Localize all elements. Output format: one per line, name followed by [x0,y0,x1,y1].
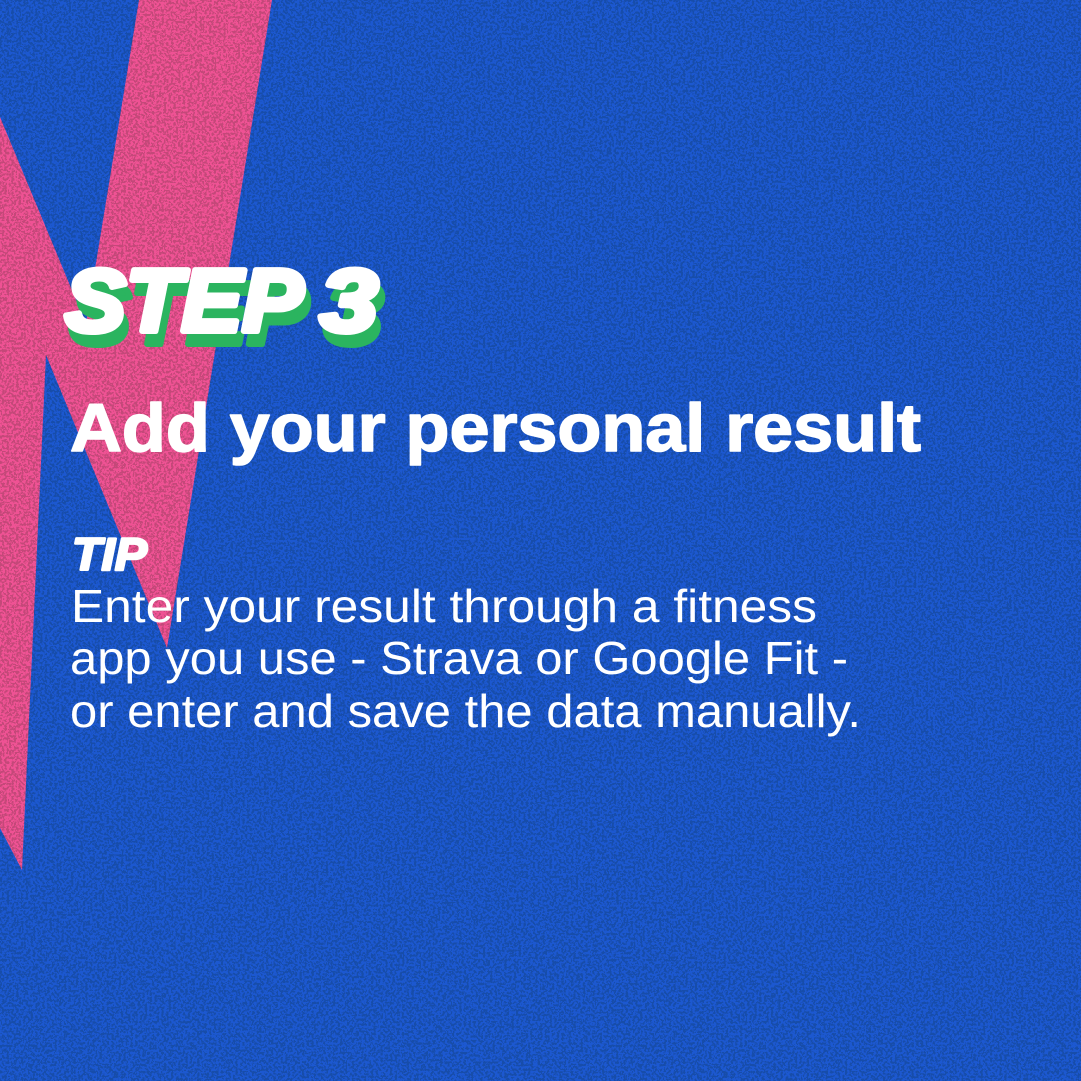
heading: STEP 3 [65,251,383,363]
heading: STEP 3: 3 [325,264,383,363]
lightning bolt shape [0,0,272,870]
tip body text: Enter your result through a fitness [71,580,817,632]
tip body text: or enter and save the data manually. [70,685,861,737]
heading: STEP 3: STEP [65,251,303,350]
tip body text: app you use - Strava or Google Fit - [70,632,848,684]
heading: STEP 3: STEP [70,264,308,363]
heading: Add your personal result: Add your personal result [70,390,921,466]
tip body text [70,580,861,737]
heading: STEP 3: 3 [320,251,378,350]
label: TIP: TIP [72,529,148,580]
